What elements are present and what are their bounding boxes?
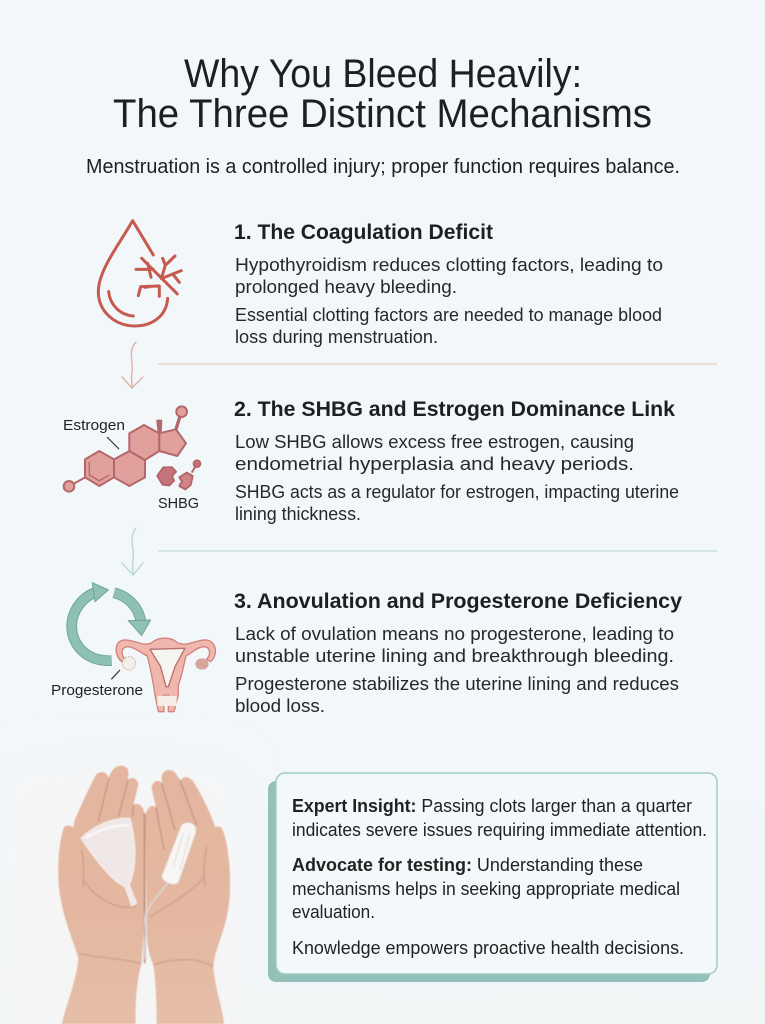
subtitle: Menstruation is a controlled injury; proper function requires balance.: [86, 156, 680, 178]
advocate for testing text: [292, 855, 680, 922]
label: SHBG: SHBG: [158, 495, 199, 512]
body text 1: Hypothyroidism reduces clotting factors, leading to: [235, 255, 663, 275]
title: [113, 52, 652, 136]
panel: anovulation and progesterone: [51, 583, 682, 716]
heading 3: 3. Anovulation and Progesterone Deficiency: [234, 590, 682, 613]
label: Progesterone: Progesterone: [51, 682, 143, 699]
body text 2: endometrial hyperplasia and heavy periods.: [235, 454, 634, 474]
body text 1: prolonged heavy bleeding.: [235, 277, 457, 297]
heading 2: 2. The SHBG and Estrogen Dominance Link: [234, 398, 675, 421]
icon: estrogen molecule: [63, 406, 200, 512]
advocate for testing text: evaluation.: [292, 902, 375, 922]
body text 1: loss during menstruation.: [235, 327, 438, 347]
expert insight text: [292, 796, 707, 840]
advocate for testing text: mechanisms helps in seeking appropriate medical: [292, 879, 680, 899]
menstrual cup: [81, 818, 137, 906]
body text 3: blood loss.: [235, 696, 325, 716]
panel: SHBG and estrogen: [63, 398, 679, 524]
photo: cupped hands holding menstrual cup and tampon: [58, 766, 230, 1024]
body text 2: Low SHBG allows excess free estrogen, causing: [235, 432, 634, 452]
label: Estrogen: Estrogen: [63, 417, 125, 434]
body text 3: unstable uterine lining and breakthrough bleeding.: [235, 646, 674, 666]
body text 3: [235, 624, 679, 716]
expert insight text: indicates severe issues requiring immediate attention.: [292, 820, 707, 840]
title: The Three Distinct Mechanisms: [113, 92, 652, 136]
body text 3: Progesterone stabilizes the uterine lining and reduces: [235, 674, 679, 694]
icon: cycle arrows and uterus: [51, 583, 215, 712]
heading 1: 1. The Coagulation Deficit: [234, 221, 493, 244]
title: Why You Bleed Heavily:: [184, 52, 582, 96]
body text 2: lining thickness.: [235, 504, 361, 524]
body text 2: SHBG acts as a regulator for estrogen, impacting uterine: [235, 482, 679, 502]
icon: blood drop with snowflake: [98, 221, 181, 326]
right hand: [145, 770, 230, 1024]
callout: expert insight: [268, 773, 717, 982]
left hand: [58, 766, 145, 1024]
body text 3: Lack of ovulation means no progesterone, leading to: [235, 624, 674, 644]
tampon: [144, 823, 196, 960]
arrow: second to third: [122, 528, 143, 575]
advocate for testing text: Advocate for testing: Understanding these: [292, 855, 643, 875]
closing statement: Knowledge empowers proactive health decisions.: [292, 938, 684, 958]
body text 2: [235, 432, 679, 524]
body text 1: [235, 255, 663, 347]
expert insight text: Expert Insight: Passing clots larger than a quarter: [292, 796, 692, 816]
arrow: first to second: [122, 342, 143, 388]
panel: coagulation deficit: [98, 221, 663, 347]
body text 1: Essential clotting factors are needed to manage blood: [235, 305, 662, 325]
